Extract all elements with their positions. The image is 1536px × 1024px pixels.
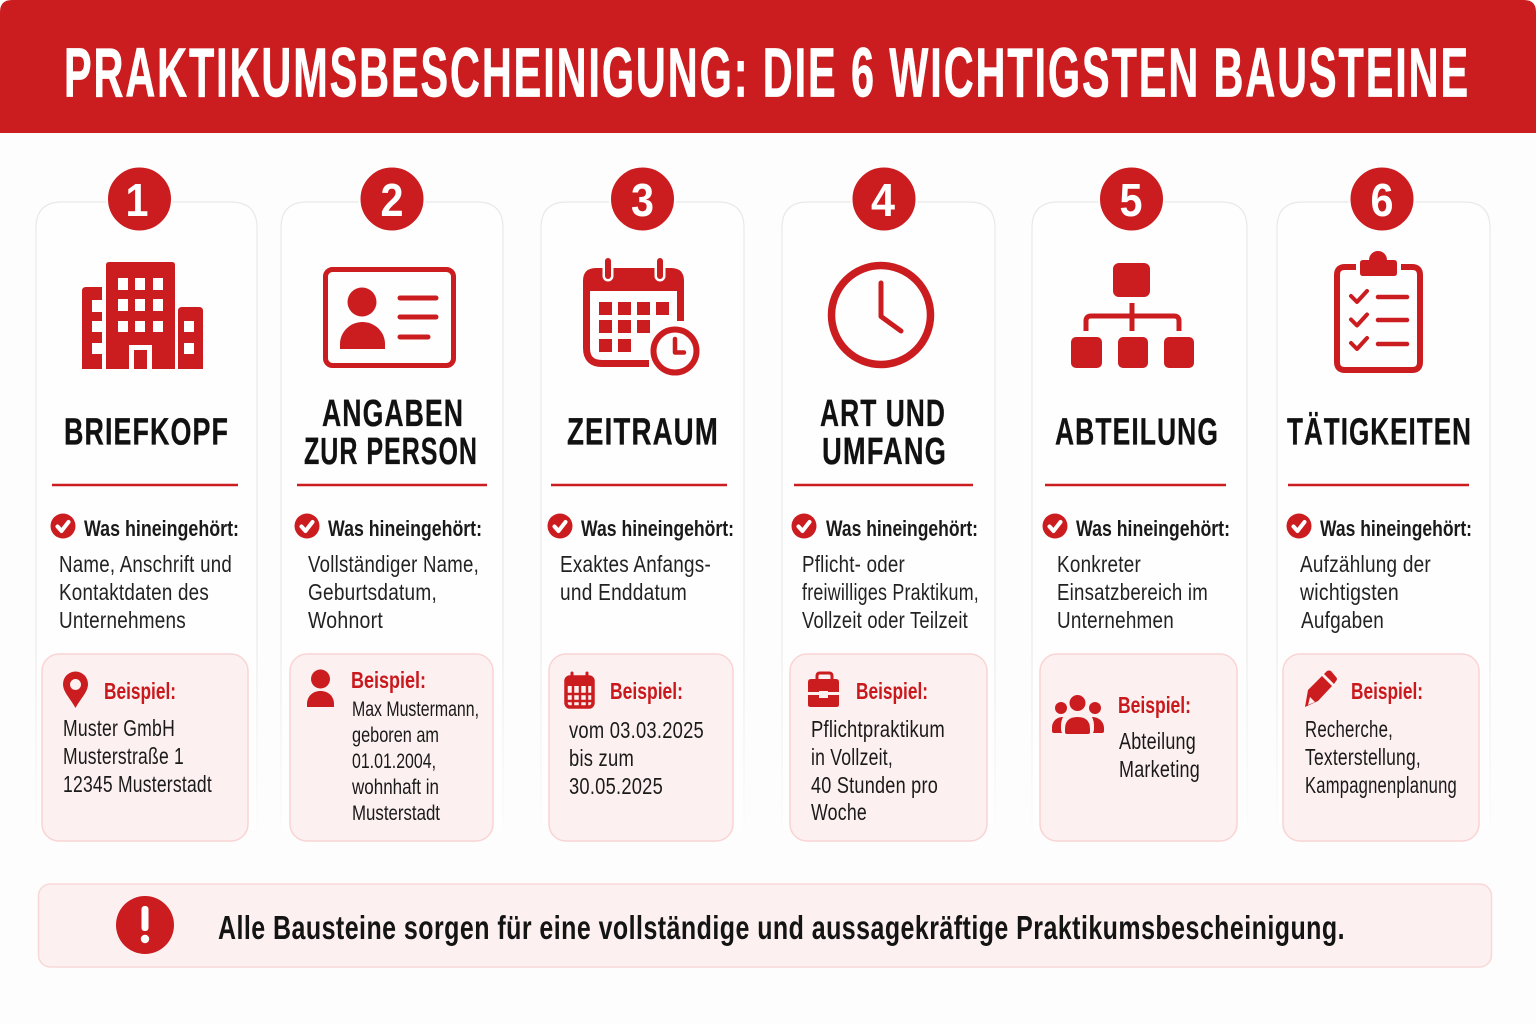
check icon <box>294 514 320 538</box>
example text: Abteilung <box>1119 728 1196 754</box>
example text: Musterstadt <box>352 802 440 825</box>
description <box>59 551 232 633</box>
example label: Beispiel: <box>610 678 683 704</box>
description: Name, Anschrift und <box>59 551 232 577</box>
number badge 4: 4 <box>871 174 895 226</box>
description: und Enddatum <box>560 579 687 605</box>
heading <box>820 393 947 473</box>
subheading: Was hineingehört: <box>328 516 482 541</box>
description: Aufgaben <box>1301 607 1384 633</box>
icon: briefcase <box>808 673 839 707</box>
description <box>560 551 711 605</box>
heading: ZEITRAUM <box>567 412 719 454</box>
subheading: Was hineingehört: <box>1320 516 1472 541</box>
heading: ZUR PERSON <box>304 431 478 473</box>
description: Kontaktdaten des <box>59 579 209 605</box>
example text <box>351 698 479 825</box>
panel: 6 Tätigkeiten <box>1277 166 1490 841</box>
example box <box>42 654 248 841</box>
example text: wohnhaft in <box>351 776 439 799</box>
example text: 30.05.2025 <box>569 773 663 799</box>
example text <box>811 716 945 825</box>
example box <box>790 654 987 841</box>
description: freiwilliges Praktikum, <box>802 579 979 605</box>
example text: Marketing <box>1119 756 1200 782</box>
example text: Kampagnenplanung <box>1305 772 1457 798</box>
heading <box>304 393 478 473</box>
icon: exclamation <box>116 896 174 954</box>
number badge 2: 2 <box>380 174 404 226</box>
description <box>1057 551 1208 633</box>
description: Einsatzbereich im <box>1057 579 1208 605</box>
panel: 5 Abteilung <box>1032 166 1247 841</box>
icon: calendar with clock <box>583 261 696 372</box>
subheading: Was hineingehört: <box>826 516 978 541</box>
icon: office building <box>82 262 203 369</box>
example text <box>569 717 704 799</box>
example label: Beispiel: <box>856 678 928 704</box>
heading: UMFANG <box>822 431 947 473</box>
panel: 4 Art und Umfang <box>782 166 995 841</box>
number badge 5 <box>1099 166 1164 232</box>
example text: 12345 Musterstadt <box>63 771 212 797</box>
panel: 1 Briefkopf <box>36 166 257 841</box>
example label: Beispiel: <box>1118 692 1191 718</box>
check icon <box>50 514 76 538</box>
check icon <box>548 514 572 538</box>
example box <box>1040 654 1237 841</box>
icon: clock <box>832 266 930 364</box>
description: Vollzeit oder Teilzeit <box>802 607 968 633</box>
example text: Musterstraße 1 <box>63 743 184 769</box>
example box <box>1283 654 1479 841</box>
description: Geburtsdatum, <box>308 579 437 605</box>
subheading: Was hineingehört: <box>581 516 734 541</box>
example text: Max Mustermann, <box>352 698 479 721</box>
example text: 40 Stunden pro <box>811 772 938 798</box>
number badge 1: 1 <box>126 174 148 226</box>
check icon <box>1042 514 1068 538</box>
icon: ID card <box>326 270 454 366</box>
example label: Beispiel: <box>1351 678 1423 704</box>
check icon <box>1286 514 1312 538</box>
description: Unternehmens <box>59 607 186 633</box>
description: Exaktes Anfangs- <box>560 551 711 577</box>
example text: Pflichtpraktikum <box>811 716 945 742</box>
example text: Muster GmbH <box>63 715 175 741</box>
example text: Woche <box>811 799 867 825</box>
example text: in Vollzeit, <box>811 744 893 770</box>
example text: 01.01.2004, <box>352 750 436 773</box>
example box <box>549 654 733 841</box>
header banner <box>0 0 1536 133</box>
icon: pencil <box>1305 670 1337 707</box>
example label: Beispiel: <box>351 667 426 693</box>
icon: people group <box>1052 695 1104 734</box>
example text: bis zum <box>569 745 634 771</box>
panel: 3 Zeitraum <box>541 166 744 841</box>
number badge 6 <box>1350 166 1414 232</box>
description: Wohnort <box>308 607 383 633</box>
example text <box>63 715 212 797</box>
heading: ABTEILUNG <box>1055 412 1219 454</box>
description: wichtigsten <box>1299 579 1399 605</box>
description: Konkreter <box>1057 551 1141 577</box>
icon: small calendar <box>566 673 593 707</box>
description: Pflicht- oder <box>802 551 905 577</box>
bottom callout <box>38 884 1492 967</box>
description: Vollständiger Name, <box>308 551 479 577</box>
example text: Recherche, <box>1305 716 1393 742</box>
heading: ANGABEN <box>322 393 464 435</box>
icon: person <box>307 670 334 707</box>
example text: vom 03.03.2025 <box>569 717 704 743</box>
description: Unternehmen <box>1057 607 1174 633</box>
example text: Texterstellung, <box>1305 744 1421 770</box>
example text <box>1305 716 1457 798</box>
number badge 6: 6 <box>1370 174 1394 226</box>
description <box>1299 551 1431 633</box>
example text: geboren am <box>352 724 439 747</box>
subheading: Was hineingehört: <box>84 516 239 541</box>
example box <box>290 654 493 841</box>
heading: ART UND <box>820 393 946 435</box>
number badge 2 <box>360 166 424 232</box>
example text <box>1119 728 1200 782</box>
check icon <box>792 514 816 538</box>
icon: org chart <box>1071 263 1194 368</box>
number badge 5: 5 <box>1120 174 1142 226</box>
description <box>802 551 979 633</box>
description <box>308 551 479 633</box>
number badge 3: 3 <box>631 174 654 226</box>
example label: Beispiel: <box>104 678 176 704</box>
number badge 3 <box>610 166 675 232</box>
icon: clipboard checklist <box>1337 251 1420 370</box>
description: Aufzählung der <box>1300 551 1431 577</box>
number badge 1 <box>107 166 172 232</box>
heading: BRIEFKOPF <box>64 412 229 454</box>
number badge 4 <box>852 166 916 232</box>
subheading: Was hineingehört: <box>1076 516 1230 541</box>
panel: 2 Angaben zur Person <box>281 166 503 841</box>
icon: map pin <box>63 671 88 708</box>
